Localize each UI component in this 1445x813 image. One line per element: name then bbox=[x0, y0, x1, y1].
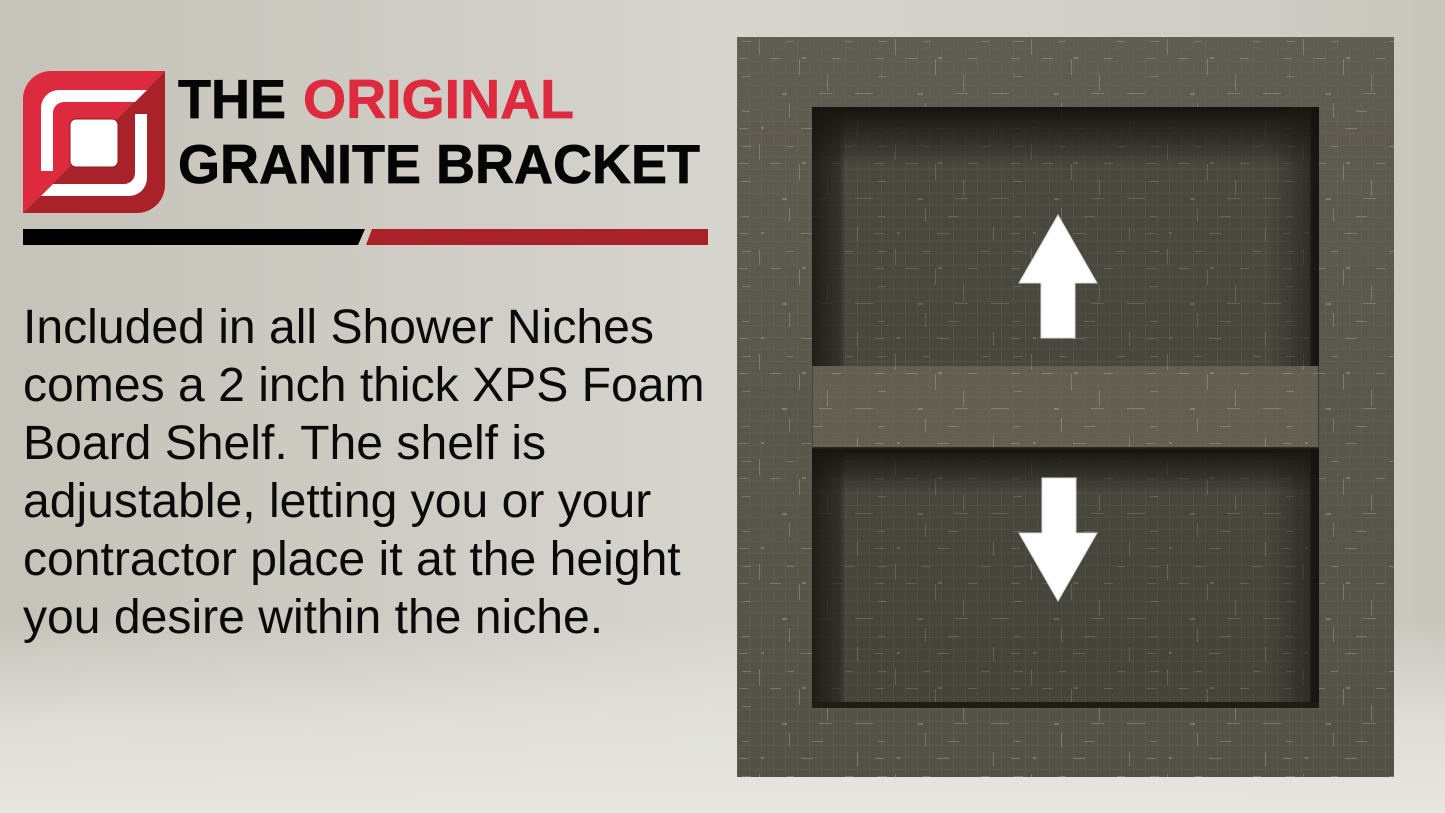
title: GRANITE BRACKET bbox=[178, 133, 700, 195]
arrow down bbox=[1019, 478, 1097, 601]
title: ORIGINAL bbox=[303, 68, 574, 130]
adjustable shelf bbox=[812, 366, 1319, 448]
panel: shower niche bbox=[737, 37, 1394, 777]
title: THE bbox=[178, 68, 286, 130]
body text: Board Shelf. The shelf is bbox=[23, 416, 546, 470]
title bbox=[178, 68, 700, 195]
arrow up bbox=[1019, 215, 1097, 338]
body text: comes a 2 inch thick XPS Foam bbox=[23, 358, 705, 412]
niche outer frame bbox=[737, 37, 1394, 777]
niche recess bbox=[812, 107, 1319, 708]
logo: granite bracket mark bbox=[23, 71, 165, 213]
body text: Included in all Shower Niches bbox=[23, 300, 654, 354]
divider bars bbox=[23, 229, 708, 245]
body text: adjustable, letting you or your bbox=[23, 474, 651, 528]
body text: you desire within the niche. bbox=[23, 590, 603, 644]
body text: contractor place it at the height bbox=[23, 532, 681, 586]
